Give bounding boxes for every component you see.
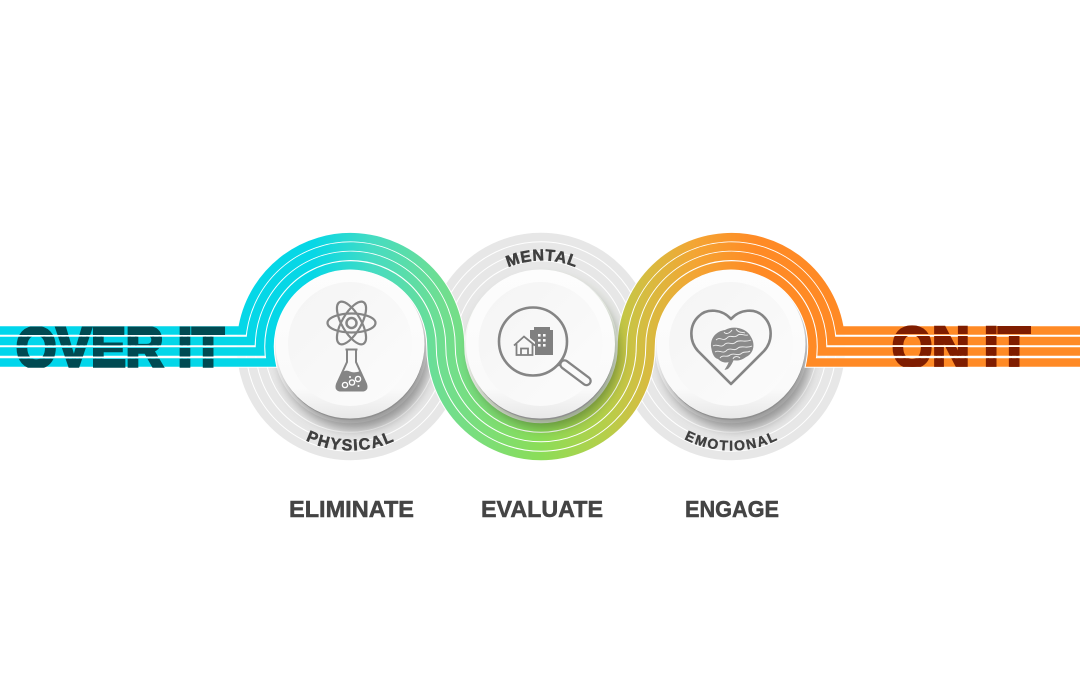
left label: OVER IT: OVER IT bbox=[16, 316, 224, 380]
disk: emotional bbox=[656, 270, 806, 420]
right label: ON IT: ON IT bbox=[892, 316, 1030, 380]
label: EMOTIONAL: EMOTIONAL bbox=[684, 430, 778, 451]
heading: ENGAGE: ENGAGE bbox=[685, 496, 779, 522]
icon: atom bbox=[328, 297, 376, 349]
heading: ELIMINATE: ELIMINATE bbox=[289, 496, 414, 522]
icon: heart with brain bbox=[691, 311, 771, 384]
icon: magnifier with buildings bbox=[499, 308, 586, 381]
label: MENTAL: MENTAL bbox=[505, 249, 576, 268]
gray rings behind circles bbox=[241, 237, 841, 456]
disk: physical bbox=[276, 270, 424, 420]
label: PHYSICAL: PHYSICAL bbox=[306, 430, 394, 451]
disk: mental bbox=[466, 270, 615, 420]
heading: EVALUATE: EVALUATE bbox=[481, 496, 603, 522]
shadow of middle disk bbox=[471, 280, 619, 428]
flowing ribbon bands bbox=[0, 237, 1080, 456]
shadows of outer disks bbox=[281, 281, 810, 429]
icon: flask bbox=[336, 350, 367, 392]
